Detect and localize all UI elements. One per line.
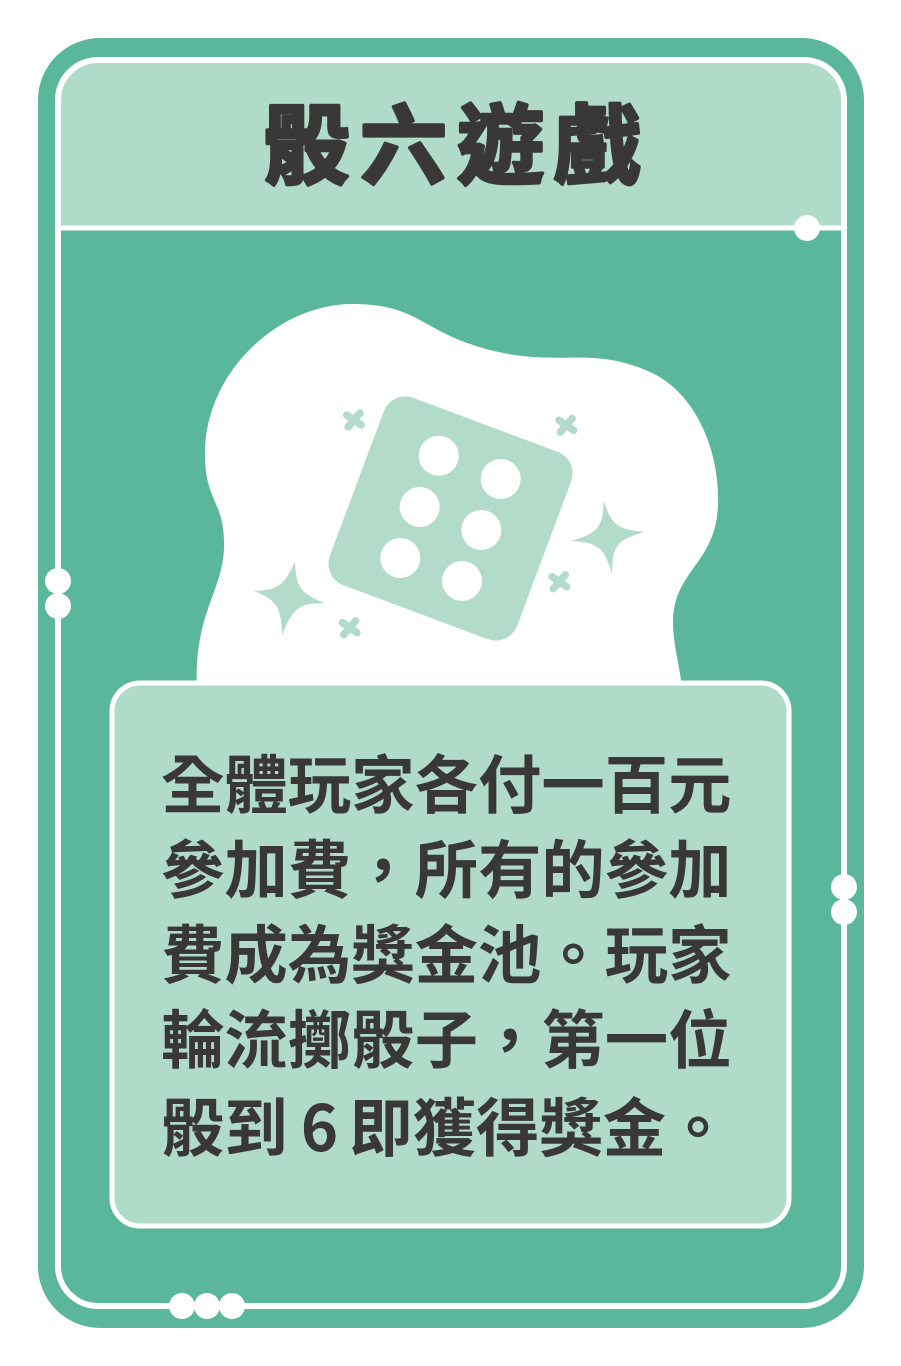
body text: 骰到6即獲得獎金。 bbox=[161, 1078, 730, 1170]
body text bbox=[161, 752, 732, 1170]
icon: large sparkles bbox=[253, 500, 644, 635]
text panel bbox=[112, 683, 789, 1226]
icon: small crosses bbox=[342, 413, 574, 635]
body text: 輪流擲骰子，第一位 bbox=[161, 1007, 732, 1077]
frame dots bbox=[45, 215, 857, 1319]
body text: 參加費，所有的參加 bbox=[161, 837, 732, 907]
header band bbox=[58, 60, 844, 228]
body text: 全體玩家各付一百元 bbox=[161, 752, 732, 822]
body text: 費成為獎金池。玩家 bbox=[161, 922, 732, 992]
white blob bbox=[197, 304, 718, 690]
inner white frame bbox=[58, 60, 844, 1306]
icon: tilted die bbox=[322, 390, 579, 647]
title: 骰六遊戲 bbox=[263, 99, 651, 196]
